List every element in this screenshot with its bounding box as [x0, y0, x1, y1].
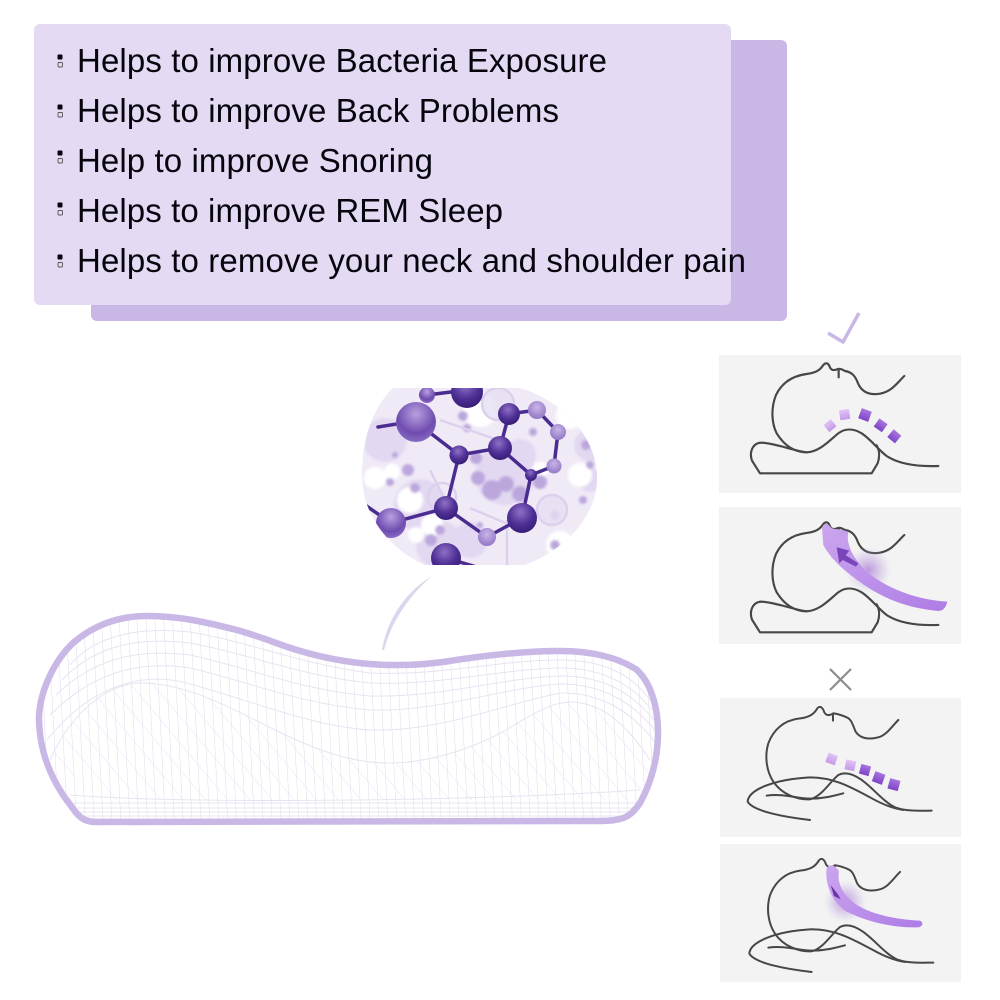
- arrow: [837, 547, 858, 567]
- pillow outline: [39, 616, 658, 822]
- neck illustration: [751, 522, 947, 632]
- panel: correct posture with spine band: [719, 507, 961, 644]
- connector: bubble to pillow: [382, 576, 432, 650]
- bullet 2: [58, 104, 62, 117]
- glow: [845, 547, 892, 593]
- pillow wireframe illustration: [30, 610, 670, 825]
- bullet 5: [58, 254, 62, 267]
- bullet 3: [58, 150, 62, 163]
- molecule background mottling: [363, 393, 606, 569]
- bullet 1: [58, 54, 62, 67]
- panel: benefits list: [34, 24, 746, 305]
- panel: wrong posture with squares: [720, 698, 961, 837]
- neck illustration: [751, 363, 938, 473]
- arrow: [831, 885, 841, 899]
- icon: cross mark: [830, 669, 851, 690]
- text: benefit 5: Helps to remove your neck and shoulder pain: [77, 242, 746, 279]
- spine band: [826, 865, 922, 927]
- panel: wrong posture with spine band: [720, 844, 961, 982]
- glow: [823, 880, 867, 923]
- text: benefit 2: Helps to improve Back Problems: [77, 92, 559, 129]
- background panel: back shadow card: [91, 40, 787, 321]
- pressure squares: [823, 408, 901, 443]
- icon: check mark: [828, 313, 859, 342]
- text: benefit 4: Helps to improve REM Sleep: [77, 192, 503, 229]
- neck illustration: [749, 859, 933, 972]
- pressure squares: [825, 753, 901, 791]
- icon: molecule bubble: [362, 388, 597, 565]
- molecule bonds: [365, 390, 558, 568]
- bullet 4: [58, 202, 62, 215]
- spine band: [822, 524, 947, 611]
- text: benefit 1: Helps to improve Bacteria Exposure: [77, 42, 607, 79]
- text: benefit 3: Help to improve Snoring: [77, 142, 433, 179]
- pillow mesh: [44, 619, 654, 819]
- neck illustration: [748, 707, 932, 820]
- molecule spheres: [376, 388, 566, 565]
- panel: correct posture with squares: [719, 355, 961, 493]
